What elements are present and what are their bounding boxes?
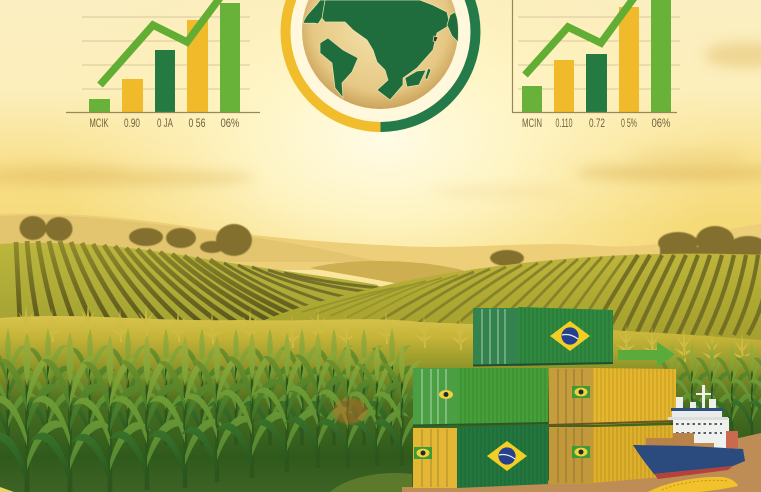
orange leaf highlight <box>333 398 367 424</box>
arrow: export direction <box>618 342 675 367</box>
axis labels <box>90 118 240 130</box>
shipping containers <box>413 307 676 488</box>
gridlines <box>82 17 250 89</box>
ring: green half <box>380 0 476 127</box>
container: middle left green <box>413 368 548 426</box>
cream backing disc <box>288 0 472 124</box>
small corn cob, lower left <box>0 487 14 492</box>
clouds <box>0 42 761 197</box>
globe sphere <box>302 0 458 109</box>
distant hills <box>0 214 761 284</box>
bridge <box>672 408 722 418</box>
axes <box>512 0 677 112</box>
mast and funnels <box>676 385 716 409</box>
right bar chart <box>512 0 680 130</box>
trend line <box>525 0 636 75</box>
axis labels: MCIK <box>90 118 109 130</box>
superstructure <box>668 417 738 450</box>
container: bottom left green with yellow door <box>413 425 548 488</box>
hull <box>633 445 745 474</box>
deck cargo <box>646 433 714 451</box>
container: top green <box>473 307 613 366</box>
axis labels: 06% <box>220 118 240 130</box>
right crop field <box>250 254 761 345</box>
axis labels: 0 5% <box>621 118 637 130</box>
continents <box>303 0 458 100</box>
axis labels: 0.90 <box>124 118 140 130</box>
corn plants, front row <box>0 332 434 492</box>
globe emblem <box>286 0 476 127</box>
axis labels <box>522 118 670 130</box>
ring: yellow half <box>286 0 380 127</box>
left crop field <box>0 241 380 340</box>
axis labels: 0.110 <box>556 118 572 130</box>
corn plants, back row <box>0 328 761 445</box>
bars <box>522 0 671 112</box>
gridlines <box>518 17 680 89</box>
trees on the horizon <box>20 216 761 266</box>
cargo ship <box>633 385 745 479</box>
corn cob <box>646 477 738 492</box>
container: bottom right yellow <box>549 425 674 484</box>
ground and dirt path <box>330 433 761 492</box>
left bar chart <box>66 0 260 130</box>
axis labels: 0.72 <box>589 118 605 130</box>
axis labels: MCIN <box>522 118 542 130</box>
container: middle right yellow <box>549 368 676 425</box>
corn tassels <box>16 302 752 366</box>
axis labels: 06% <box>652 118 670 130</box>
bars <box>89 3 240 112</box>
axis labels: 0 56 <box>188 118 206 130</box>
sky background <box>0 0 761 300</box>
axis labels: 0 JA <box>157 118 173 130</box>
trend line <box>100 0 222 85</box>
corn field band <box>0 316 761 492</box>
axis <box>66 112 260 114</box>
